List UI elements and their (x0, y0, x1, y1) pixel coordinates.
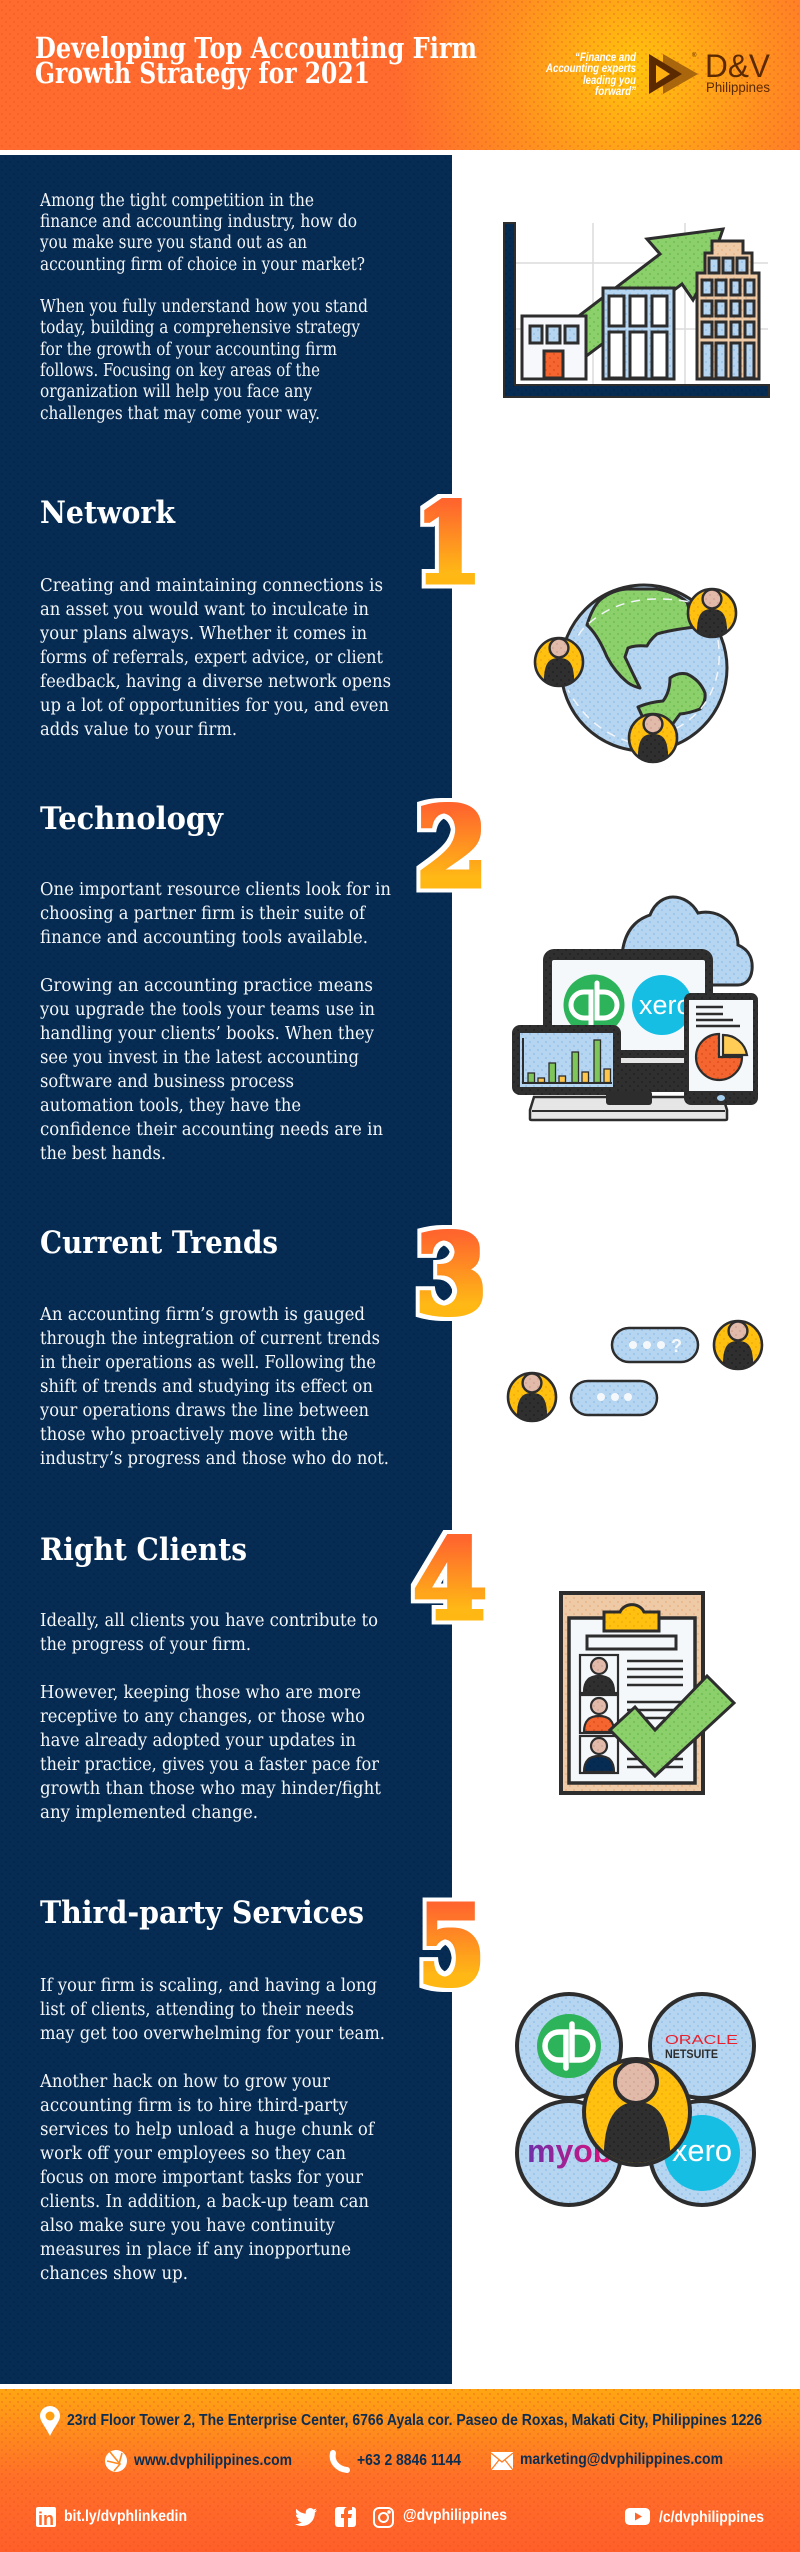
section 2: Technology text: choosing a partner firm is their suite of (40, 904, 366, 924)
section 5: Third-party Services text: list of clients, attending to their needs (40, 2000, 354, 2020)
section 2: Technology text: handling your clients’ books. When they (40, 1024, 374, 1044)
section 5: Third-party Services text: Another hack on how to grow your (39, 2072, 331, 2092)
Instagram handle: @dvphilippines (403, 2507, 507, 2524)
section 3: Current Trends text: those who proactively move with the (40, 1425, 348, 1445)
logo: D&V Philippines: D&V (705, 48, 771, 84)
section 4: Right Clients text: have already adopted your updates in (40, 1731, 356, 1751)
section 1: Network text (39, 576, 391, 740)
intro text: challenges that may come your way. (40, 404, 320, 424)
section 2: Technology text: confidence their accounting needs are in (40, 1120, 383, 1140)
icon: phone (333, 2453, 347, 2470)
section 5: Third-party Services text: services to help unload a huge chunk of (40, 2120, 375, 2140)
section 2: Technology text: see you invest in the latest accounting (40, 1048, 359, 1068)
section 2: Technology text: automation tools, they have the (40, 1096, 301, 1116)
section 1: Network text: up a lot of opportunities for you, and even (40, 696, 389, 716)
section 5: Third-party Services text: may get too overwhelming for your team. (40, 2024, 385, 2044)
icon: globe with people (535, 585, 736, 764)
title: Developing Top Accounting Firm (35, 31, 477, 65)
section 2: Technology text (39, 880, 391, 1164)
section 1: Network text: feedback, having a diverse network opens (40, 672, 391, 692)
icon: email envelope (491, 2452, 513, 2470)
logo: Xero (650, 2101, 754, 2205)
section 5: Third-party Services text: also make sure you have continuity (40, 2216, 335, 2236)
section 2: Technology text: One important resource clients look for in (40, 880, 391, 900)
number 4: 4 (413, 1515, 487, 1644)
section 4: Right Clients heading: Right Clients (40, 1532, 247, 1568)
section 5: Third-party Services text: If your firm is scaling, and having a long (40, 1976, 377, 1996)
icon: Facebook (335, 2507, 356, 2527)
section 1: Network text: forms of referrals, expert advice, or client (40, 648, 383, 668)
section 4: Right Clients text: the progress of your firm. (40, 1635, 251, 1655)
logo: QuickBooks (517, 1994, 621, 2098)
section 3: Current Trends heading: Current Trends (40, 1225, 278, 1261)
icon: devices with accounting software (512, 897, 758, 1120)
email: marketing@dvphilippines.com (520, 2451, 723, 2468)
tagline: forward” (595, 86, 636, 98)
logo: Oracle NetSuite: ORACLE (665, 2032, 738, 2047)
section 4: Right Clients text: their practice, gives you a faster pace for (40, 1755, 380, 1775)
section 2: Technology text: Growing an accounting practice means (40, 976, 373, 996)
title (35, 31, 477, 90)
number 5: 5 (418, 1881, 485, 2010)
logo: MYOB: myob (527, 2133, 612, 2169)
section 5: Third-party Services heading: Third-party Services (40, 1895, 364, 1931)
phone number: +63 2 8846 1144 (357, 2452, 461, 2469)
section 5: Third-party Services text (39, 1976, 385, 2284)
section 5: Third-party Services text: work off your employees so they can (40, 2144, 346, 2164)
icon: devices with accounting software: xero (639, 990, 692, 1020)
logo: D&V Philippines (649, 48, 771, 95)
section 4: Right Clients text (40, 1611, 381, 1823)
number 3: 3 (415, 1210, 487, 1339)
number 1: 1 (415, 479, 482, 608)
section 5: Third-party Services text: chances show up. (40, 2264, 188, 2284)
section 3: Current Trends text (39, 1305, 389, 1469)
icon: LinkedIn: in (38, 2509, 54, 2529)
section 1: Network heading: Network (40, 495, 176, 531)
logo: D&V Philippines: ® (692, 52, 697, 59)
section 1: Network text: adds value to your firm. (40, 720, 237, 740)
section 5: Third-party Services text: measures in place if any inopportune (40, 2240, 351, 2260)
LinkedIn link: bit.ly/dvphlinkedin (64, 2508, 187, 2525)
title: Growth Strategy for 2021 (35, 56, 370, 90)
logo: Xero: xero (672, 2133, 732, 2168)
logo: Oracle NetSuite (650, 1994, 754, 2098)
icon: Instagram (374, 2508, 393, 2527)
intro text: follows. Focusing on key areas of the (40, 361, 320, 381)
intro text: finance and accounting industry, how do (40, 212, 357, 232)
section 2: Technology text: software and business process (40, 1072, 294, 1092)
YouTube link: /c/dvphilippines (659, 2509, 764, 2526)
logo: MYOB (517, 2101, 621, 2205)
tagline: Accounting experts (545, 63, 636, 75)
section 3: Current Trends text: An accounting firm’s growth is gauged (39, 1305, 365, 1325)
footer banner (0, 2389, 800, 2552)
logo: Oracle NetSuite: NETSUITE (665, 2049, 718, 2061)
section 3: Current Trends text: industry’s progress and those who do not. (40, 1449, 389, 1469)
section 5: Third-party Services text: clients. In addition, a back-up team can (40, 2192, 369, 2212)
section 4: Right Clients text: receptive to any changes, or those who (40, 1707, 365, 1727)
section 3: Current Trends text: in their operations as well. Following the (40, 1353, 376, 1373)
icon: website globe (105, 2450, 127, 2472)
intro text: Among the tight competition in the (39, 191, 314, 211)
section 4: Right Clients text: growth than those who may hinder/fight (40, 1779, 381, 1799)
person (584, 2059, 690, 2170)
section 2: Technology text: finance and accounting tools available. (40, 928, 368, 948)
tagline: “Finance and (575, 52, 637, 64)
section 3: Current Trends text: shift of trends and studying its effect on (40, 1377, 373, 1397)
icon: growth chart with buildings (504, 223, 769, 397)
intro text: When you fully understand how you stand (40, 297, 368, 317)
section 5: Third-party Services text: accounting firm is to hire third-party (40, 2096, 348, 2116)
icon: conversation bubbles and people: ? (671, 1336, 682, 1356)
section 3: Current Trends text: your operations draws the line between (39, 1401, 369, 1421)
intro text (39, 191, 368, 424)
section 2: Technology text: the best hands. (40, 1144, 166, 1164)
navy content panel (0, 155, 452, 2384)
number 2: 2 (416, 783, 488, 912)
section 4: Right Clients text: However, keeping those who are more (40, 1683, 361, 1703)
icon: third-party service logos with person (517, 1994, 754, 2205)
icon: Twitter (295, 2508, 317, 2526)
section 2: Technology heading: Technology (40, 801, 224, 837)
section 4: Right Clients text: any implemented change. (40, 1803, 258, 1823)
section 1: Network text: your plans always. Whether it comes in (39, 624, 367, 644)
icon: location pin (40, 2406, 60, 2436)
tagline (545, 52, 637, 98)
section 1: Network text: Creating and maintaining connections is (40, 576, 383, 596)
intro text: you make sure you stand out as an (39, 233, 307, 253)
website: www.dvphilippines.com (133, 2452, 292, 2469)
logo: D&V Philippines: Philippines (706, 79, 770, 95)
icon: conversation bubbles and people (508, 1321, 762, 1423)
icon: YouTube (625, 2508, 650, 2525)
intro text: for the growth of your accounting firm (40, 340, 337, 360)
tagline: leading you (583, 75, 636, 87)
section 2: Technology text: you upgrade the tools your teams use in (39, 1000, 375, 1020)
section 3: Current Trends text: through the integration of current trends (40, 1329, 380, 1349)
section 1: Network text: an asset you would want to inculcate in (40, 600, 369, 620)
section 4: Right Clients text: Ideally, all clients you have contribute to (40, 1611, 378, 1631)
section 5: Third-party Services text: focus on more important tasks for your (40, 2168, 364, 2188)
icon: clipboard with check mark (561, 1593, 734, 1793)
intro text: accounting firm of choice in your market? (40, 255, 365, 275)
header banner (0, 0, 800, 150)
intro text: today, building a comprehensive strategy (40, 318, 360, 338)
intro text: organization will help you face any (40, 382, 312, 402)
